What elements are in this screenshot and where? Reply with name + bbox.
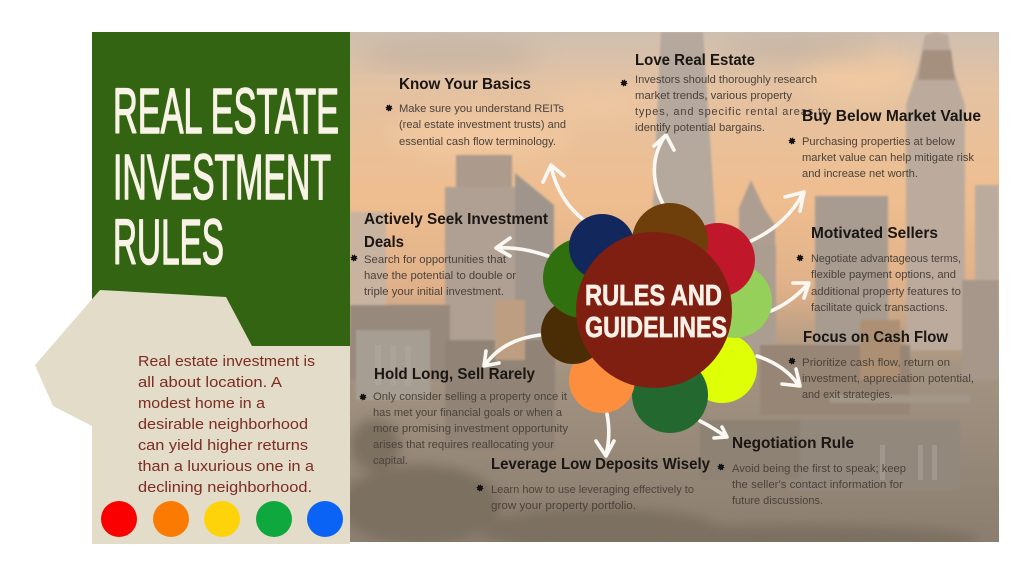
- text block: location summary: modest home in a: [138, 395, 266, 412]
- rule: hold long, sell rarely: more promising investment opportunity: [373, 423, 569, 435]
- rule: buy below market value: [789, 108, 981, 180]
- rule: negotiation rule: [718, 435, 906, 507]
- rule: negotiation rule: Negotiation Rule: [732, 435, 854, 452]
- title: [113, 75, 339, 278]
- rule: leverage low deposits wisely: Learn how to use leveraging effectively to: [491, 484, 694, 496]
- rule: love real estate: Investors should thoroughly research: [635, 74, 817, 86]
- text block: location summary: desirable neighborhood: [138, 416, 308, 433]
- rule: love real estate: types, and specific rental areas to: [635, 106, 828, 118]
- text block: location summary: Real estate investment is: [138, 353, 315, 370]
- rule: leverage low deposits wisely: [477, 456, 710, 512]
- panel: green title block: [92, 32, 350, 346]
- rule: focus on cash flow: Focus on Cash Flow: [803, 329, 949, 346]
- rule: motivated sellers: [797, 225, 961, 314]
- text block: location summary: all about location. A: [138, 374, 282, 391]
- rule: focus on cash flow: Prioritize cash flow, return on: [802, 357, 950, 369]
- heading: rules and guidelines: [585, 280, 727, 344]
- rule: actively seek investment deals: [351, 211, 548, 298]
- rule: focus on cash flow: [789, 329, 974, 401]
- rule: hold long, sell rarely: capital.: [373, 455, 408, 467]
- title: RULES: [113, 206, 224, 278]
- rule: motivated sellers: facilitate quick transactions.: [811, 302, 948, 314]
- rule: love real estate: market trends, various property: [635, 90, 793, 102]
- rule: hold long, sell rarely: arises that requires reallocating your: [373, 439, 554, 451]
- rule: focus on cash flow: and exit strategies.: [802, 389, 893, 401]
- rule: leverage low deposits wisely: Leverage Low Deposits Wisely: [491, 456, 710, 473]
- rule: know your basics: Know Your Basics: [399, 76, 531, 93]
- rule: negotiation rule: the seller's contact information for: [732, 479, 903, 491]
- rule: buy below market value: Buy Below Market Value: [802, 108, 981, 125]
- rule: know your basics: Make sure you understand REITs: [399, 103, 565, 115]
- panel: beige description block: [35, 290, 350, 544]
- rule: leverage low deposits wisely: grow your property portfolio.: [491, 500, 636, 512]
- text block: location summary: than a luxurious one in a: [138, 458, 315, 475]
- rule: actively seek investment deals: triple your initial investment.: [364, 286, 504, 298]
- rule: love real estate: Love Real Estate: [635, 52, 755, 69]
- heading: rules and guidelines: GUIDELINES: [585, 312, 727, 344]
- arrows from the flower to each rule: [484, 135, 809, 456]
- rule: motivated sellers: additional property features to: [811, 286, 961, 298]
- rule: actively seek investment deals: Deals: [364, 234, 404, 251]
- rule: buy below market value: and increase net worth.: [802, 168, 918, 180]
- rule: negotiation rule: Avoid being the first to speak; keep: [732, 463, 906, 475]
- text block: location summary: can yield higher returns: [138, 437, 308, 454]
- panel: skyline photo background: [340, 32, 999, 555]
- rule: love real estate: identify potential bargains.: [635, 122, 765, 134]
- rule: know your basics: essential cash flow terminology.: [399, 136, 556, 148]
- rule: actively seek investment deals: Actively Seek Investment: [364, 211, 548, 228]
- rule: actively seek investment deals: Search for opportunities that: [364, 254, 506, 266]
- flower diagram: [541, 203, 772, 433]
- rule: love real estate: [621, 52, 828, 134]
- rule: know your basics: (real estate investment trusts) and: [399, 119, 566, 131]
- rule: hold long, sell rarely: has met your financial goals or when a: [373, 407, 563, 419]
- rule: focus on cash flow: investment, appreciation potential,: [802, 373, 974, 385]
- colored dots row: [101, 501, 343, 537]
- heading: rules and guidelines: RULES AND: [585, 280, 722, 312]
- title: REAL ESTATE: [113, 75, 339, 147]
- title: INVESTMENT: [113, 141, 331, 213]
- rule: motivated sellers: Motivated Sellers: [811, 225, 938, 242]
- rule: actively seek investment deals: have the potential to double or: [364, 270, 516, 282]
- rule: negotiation rule: future discussions.: [732, 495, 823, 507]
- rule: hold long, sell rarely: Hold Long, Sell Rarely: [374, 366, 535, 383]
- rule: hold long, sell rarely: Only consider selling a property once it: [373, 391, 567, 403]
- rule: motivated sellers: Negotiate advantageous terms,: [811, 253, 961, 265]
- rule: buy below market value: market value can help mitigate risk: [802, 152, 974, 164]
- rule: buy below market value: Purchasing properties at below: [802, 136, 955, 148]
- text block: location summary: declining neighborhood.: [138, 479, 312, 496]
- text block: location summary: [138, 353, 315, 496]
- rule: motivated sellers: flexible payment options, and: [811, 269, 956, 281]
- rule: know your basics: [386, 76, 566, 148]
- rule: hold long, sell rarely: [360, 366, 569, 467]
